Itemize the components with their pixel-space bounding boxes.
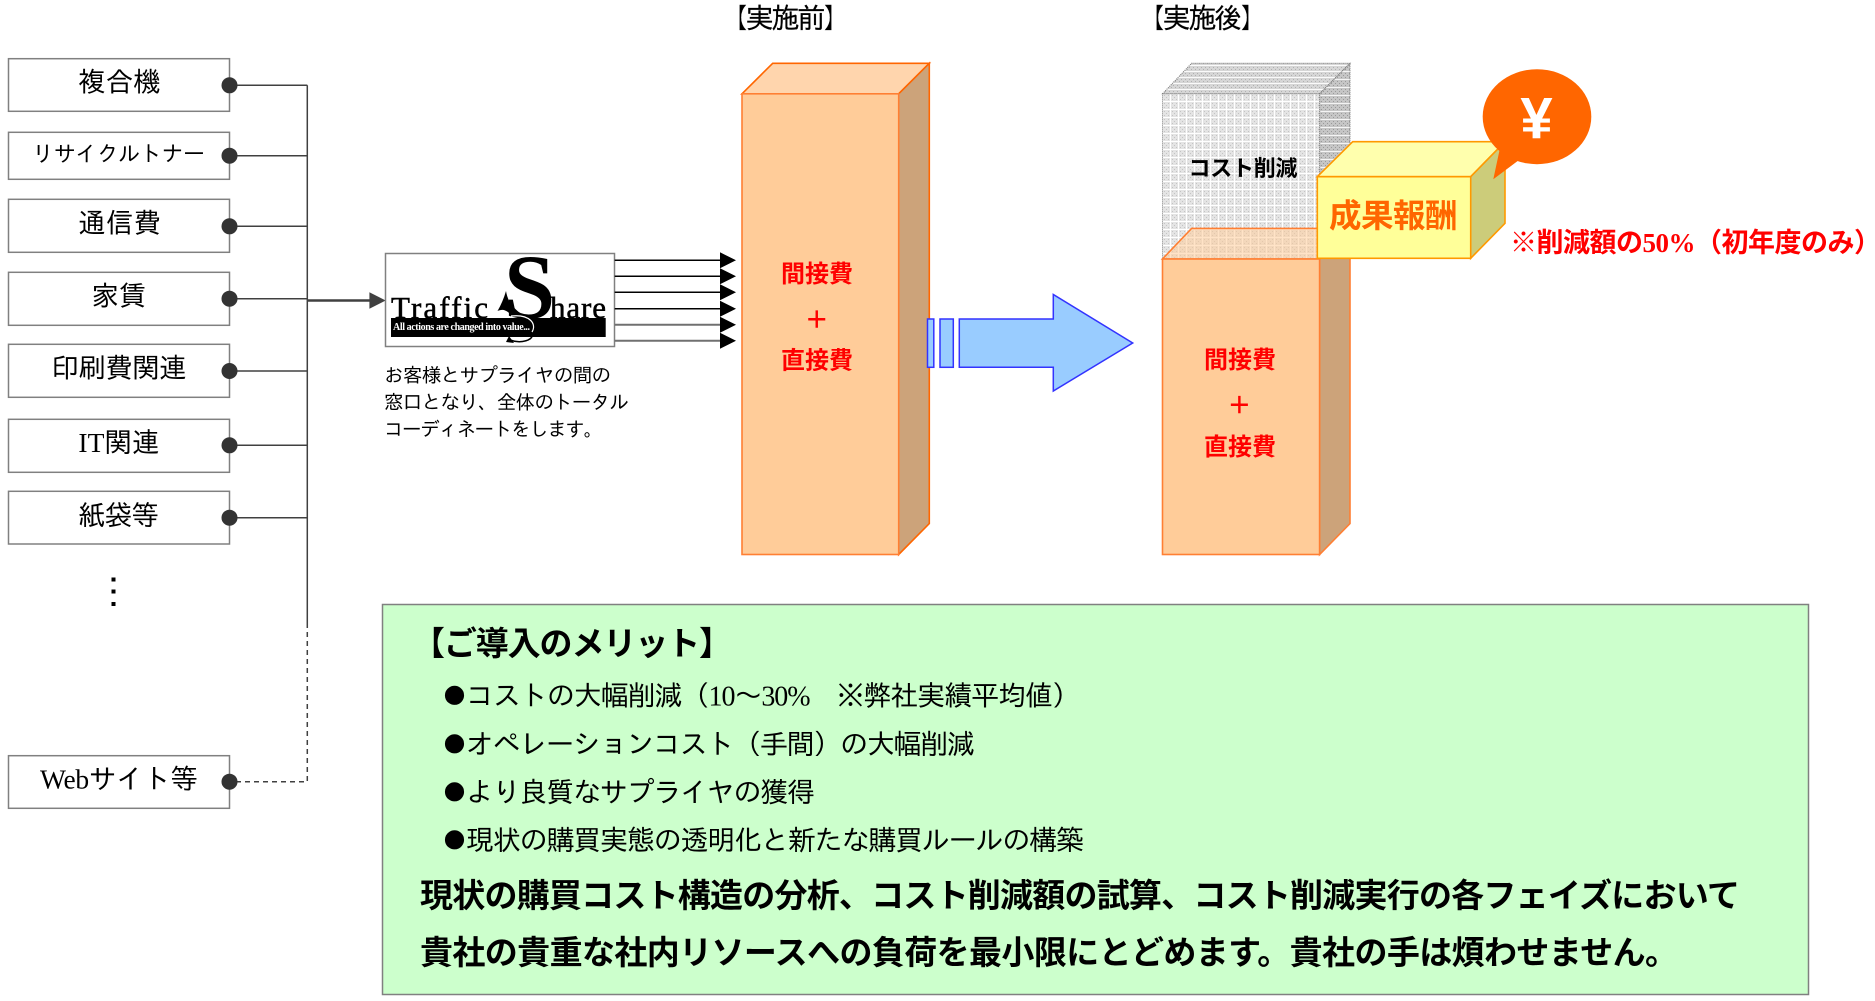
- item: 複合機: [8, 59, 238, 111]
- item: Webサイト等: Webサイト等: [40, 764, 198, 795]
- vertical ellipsis: [112, 578, 116, 606]
- item: 通信費: [8, 199, 238, 252]
- connector lines: solid trunk: [229, 85, 307, 623]
- benefit bullets: ●: [443, 684, 466, 707]
- output arrows to suppliers: [615, 252, 736, 349]
- panel: benefits: [382, 604, 1808, 994]
- item: 家賃: [8, 272, 238, 325]
- Traffic Share logo: S: [504, 236, 555, 338]
- Traffic Share logo: All actions are changed into value...: [393, 322, 530, 333]
- benefit bullets: ●: [443, 780, 466, 804]
- after block text: ＋: [1227, 394, 1251, 420]
- yen speech bubble: ¥: [1520, 86, 1553, 151]
- before block text: [781, 261, 853, 374]
- item: 紙袋等: 紙袋等: [78, 500, 159, 531]
- Traffic Share logo: [386, 236, 614, 346]
- logo description: お客様とサプライヤの間の: [384, 365, 611, 387]
- summary statement: 現状の購買コスト構造の分析、コスト削減額の試算、コスト削減実行の各フェイズにおいて: [420, 877, 1740, 915]
- heading: before: 【実施前】: [720, 4, 851, 35]
- item: 通信費: 通信費: [78, 208, 161, 239]
- item: 家賃: 家賃: [92, 281, 146, 312]
- item: IT関連: [8, 419, 238, 472]
- before block text: ＋: [805, 308, 829, 334]
- benefit bullets: より良質なサプライヤの獲得: [466, 777, 815, 809]
- after block text: [1204, 347, 1276, 461]
- cost reduction hatched block: [1162, 63, 1350, 259]
- yen speech bubble: [1483, 69, 1591, 179]
- logo description: コーディネートをします。: [384, 419, 603, 441]
- summary statement: [420, 877, 1740, 972]
- after cost block: [1162, 228, 1350, 554]
- item: IT関連: IT関連: [78, 427, 159, 458]
- item: 紙袋等: [8, 491, 238, 544]
- benefit bullets: 現状の購買実態の透明化と新たな購買ルールの構築: [466, 826, 1084, 857]
- before block text: 間接費: [781, 261, 853, 288]
- Traffic Share logo: hare: [550, 290, 606, 325]
- success fee yellow block: [1317, 142, 1505, 258]
- before block text: 直接費: [781, 348, 853, 374]
- benefit bullets: ●: [443, 732, 466, 756]
- item: 印刷費関連: 印刷費関連: [52, 353, 186, 384]
- benefit bullets: [443, 682, 1084, 857]
- logo description: 窓口となり、全体のトータル: [384, 392, 629, 414]
- logo description: [384, 365, 629, 441]
- cost reduction label: コスト削減: [1188, 156, 1298, 181]
- benefit bullets: ●: [443, 828, 466, 852]
- arrow: suppliers into Traffic Share: [307, 292, 386, 309]
- heading: after: 【実施後】: [1137, 4, 1268, 35]
- benefit bullets: オペレーションコスト（手間）の大幅削減: [466, 730, 975, 761]
- connector line: dashed from website item: [229, 623, 307, 782]
- item: 複合機: 複合機: [78, 67, 161, 98]
- benefits heading: 【ご導入のメリット】: [412, 626, 732, 663]
- block arrow: before to after: [928, 294, 1133, 391]
- item: Webサイト等: [8, 756, 238, 808]
- item: 印刷費関連: [8, 344, 238, 397]
- benefit bullets: コストの大幅削減（10～30% ※弊社実績平均値）: [466, 682, 1080, 712]
- before cost block: [742, 63, 929, 555]
- after block text: 間接費: [1204, 347, 1276, 374]
- summary statement: 貴社の貴重な社内リソースへの負荷を最小限にとどめます。貴社の手は煩わせません。: [420, 935, 1678, 972]
- item: リサイクルトナー: [8, 132, 238, 179]
- note: fee 50 percent: ※削減額の50%（初年度のみ）: [1510, 228, 1875, 258]
- success fee label: 成果報酬: [1329, 198, 1458, 235]
- after block text: 直接費: [1204, 434, 1276, 461]
- item: リサイクルトナー: リサイクルトナー: [32, 142, 205, 167]
- Traffic Share logo: Traffic: [391, 290, 488, 325]
